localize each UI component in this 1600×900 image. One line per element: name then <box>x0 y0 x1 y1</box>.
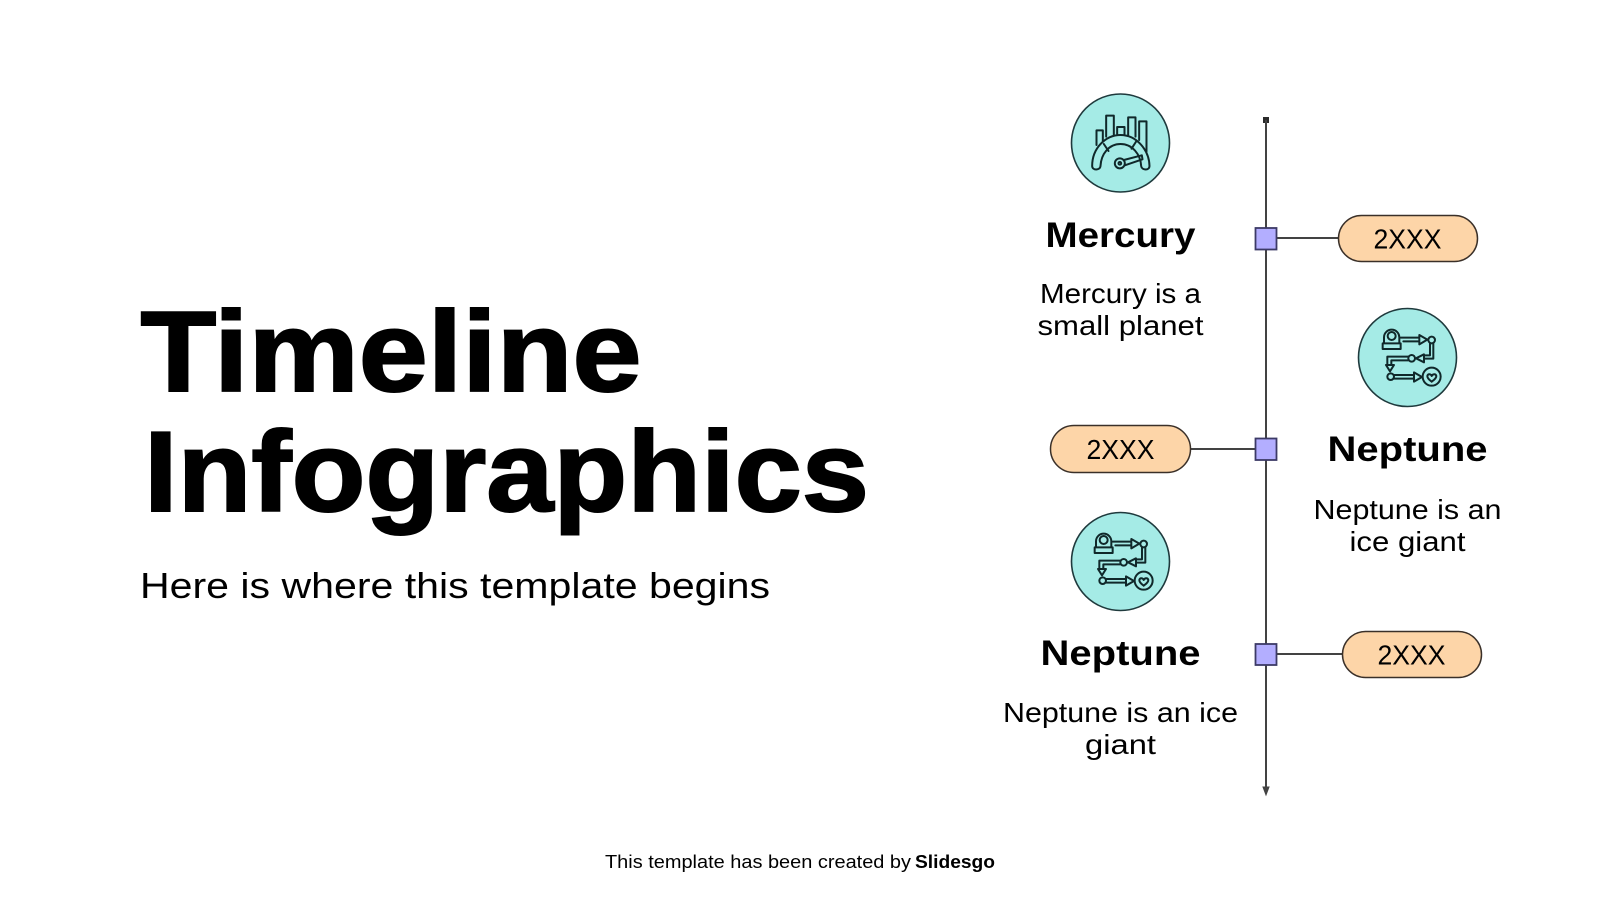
icon: process flow <box>1072 512 1170 610</box>
subtitle: Here is where this template begins <box>140 565 770 606</box>
icon: gauge dashboard <box>1072 94 1170 192</box>
date pill <box>1338 216 1478 262</box>
footer credit: This template has been created by <box>605 852 911 872</box>
milestone 1: Mercury <box>1038 94 1478 341</box>
icon: process flow <box>1358 308 1456 406</box>
title: Timeline <box>140 289 642 416</box>
connector and node <box>1256 644 1342 665</box>
description: Neptune <box>1003 697 1238 760</box>
heading: Mercury: Mercury <box>1046 216 1196 255</box>
description: Neptune: ice giant <box>1350 526 1466 557</box>
footer credit: Slidesgo <box>915 852 995 872</box>
heading: Neptune: Neptune <box>1040 634 1200 673</box>
heading: Neptune: Neptune <box>1328 430 1488 469</box>
date pill: 2XXX <box>1374 224 1442 254</box>
connector and node <box>1256 228 1338 250</box>
milestone 2: Neptune right <box>1050 308 1502 557</box>
title: Infographics <box>144 409 869 536</box>
title <box>140 289 869 536</box>
date pill: 2XXX <box>1378 640 1446 670</box>
description: Mercury: Mercury is a <box>1040 278 1202 309</box>
date pill: 2XXX <box>1086 434 1155 465</box>
description: Neptune <box>1314 494 1502 557</box>
description: Neptune: Neptune is an ice <box>1003 697 1238 728</box>
description: Neptune: Neptune is an <box>1314 494 1502 525</box>
connector and node <box>1191 438 1276 460</box>
timeline axis with arrow <box>1263 117 1269 795</box>
description: Neptune: giant <box>1085 729 1156 760</box>
description: Mercury <box>1038 278 1204 341</box>
date pill <box>1342 632 1482 678</box>
milestone 3: Neptune left <box>1003 512 1482 760</box>
date pill <box>1050 426 1190 472</box>
description: Mercury: small planet <box>1038 310 1204 341</box>
